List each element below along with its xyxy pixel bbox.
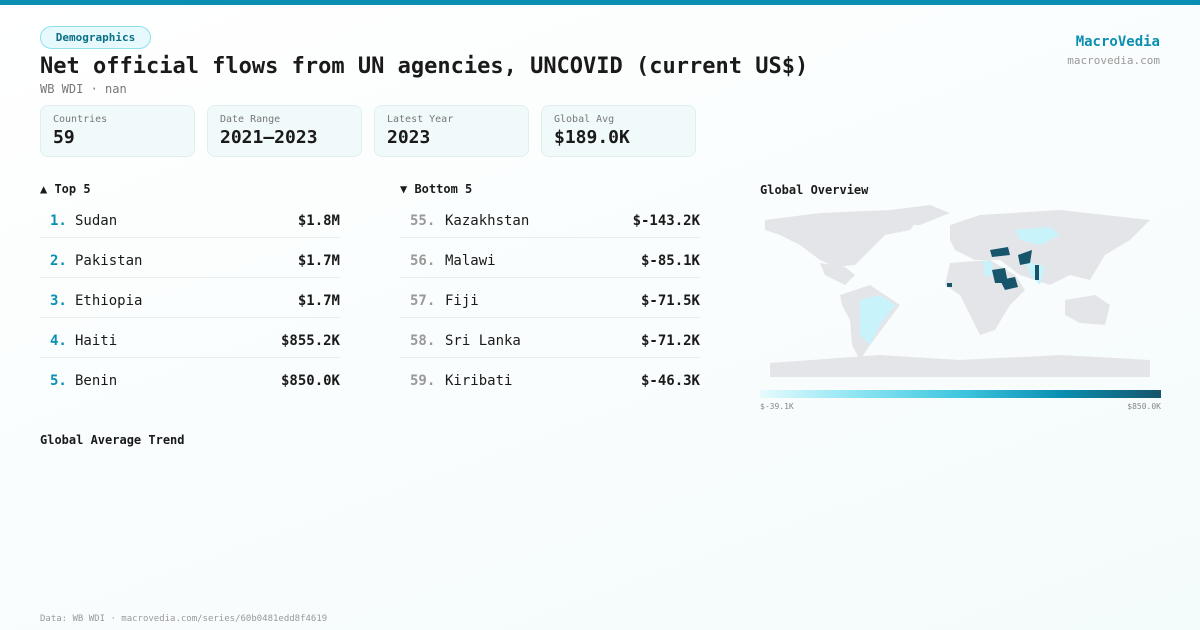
list: bottom 5: Kiribati — [445, 373, 512, 389]
brand: macrovedia.com — [1067, 54, 1160, 67]
list: bottom 5: 58. — [410, 333, 435, 349]
list: bottom 5: 56. — [410, 253, 435, 269]
list: bottom 5: Fiji — [445, 293, 479, 309]
stat card: Global Avg: $189.0K — [554, 127, 630, 148]
list: bottom 5: $-71.2K — [641, 333, 700, 349]
stat card: Countries — [40, 105, 195, 157]
map — [765, 205, 1150, 377]
list: bottom 5: Malawi — [445, 253, 496, 269]
brand — [1067, 34, 1160, 67]
stat card: Global Avg — [541, 105, 696, 157]
stat card: Date Range: 2021–2023 — [220, 127, 318, 148]
heading: Global Overview: Global Overview — [760, 183, 868, 197]
list: bottom 5: 57. — [410, 293, 435, 309]
list: top 5: $855.2K — [281, 333, 340, 349]
list: top 5: Benin — [75, 373, 117, 389]
list: top 5: Pakistan — [75, 253, 142, 269]
footer: Data: WB WDI · macrovedia.com/series/60b0481edd8f4619 — [40, 614, 327, 624]
list: bottom 5: $-85.1K — [641, 253, 700, 269]
list: top 5: $1.8M — [298, 213, 340, 229]
list: bottom 5: $-143.2K — [633, 213, 700, 229]
top bar — [0, 0, 1200, 5]
heading: Global Average Trend: Global Average Trend — [40, 433, 184, 447]
list: top 5: $850.0K — [281, 373, 340, 389]
list: top 5: $1.7M — [298, 253, 340, 269]
list: top 5: Sudan — [75, 213, 117, 229]
list: top 5: 2. — [50, 253, 67, 269]
heading: Bottom 5: ▼ Bottom 5 — [400, 182, 472, 196]
list: bottom 5: $-71.5K — [641, 293, 700, 309]
subtitle: WB WDI · nan — [40, 82, 127, 96]
list: top 5: $1.7M — [298, 293, 340, 309]
list: bottom 5: Sri Lanka — [445, 333, 521, 349]
color legend: $850.0K — [1127, 402, 1161, 411]
stat card: Date Range — [207, 105, 362, 157]
heading: Top 5: ▲ Top 5 — [40, 182, 91, 196]
tag: Demographics — [40, 26, 151, 49]
stat card: Latest Year: Latest Year — [387, 114, 453, 125]
list: top 5: 4. — [50, 333, 67, 349]
stat card: Date Range: Date Range — [220, 114, 280, 125]
stat card: Latest Year — [374, 105, 529, 157]
stat card: Countries: 59 — [53, 127, 75, 148]
brand: MacroVedia — [1076, 34, 1160, 50]
list: top 5: 3. — [50, 293, 67, 309]
list: bottom 5 — [400, 213, 700, 389]
list: top 5 — [40, 213, 340, 389]
list: bottom 5: 59. — [410, 373, 435, 389]
stat card: Countries: Countries — [53, 114, 107, 125]
stat card: Latest Year: 2023 — [387, 127, 430, 148]
list: top 5: Ethiopia — [75, 293, 142, 309]
color legend: $-39.1K — [760, 402, 794, 411]
stat card: Global Avg: Global Avg — [554, 114, 614, 125]
tag: Demographics: Demographics — [56, 31, 135, 44]
list: top 5: 5. — [50, 373, 67, 389]
list: bottom 5: Kazakhstan — [445, 213, 529, 229]
list: bottom 5: 55. — [410, 213, 435, 229]
list: bottom 5: $-46.3K — [641, 373, 700, 389]
title: Net official flows from UN agencies, UNCOVID (current US$) — [40, 54, 808, 79]
list: top 5: Haiti — [75, 333, 117, 349]
color legend — [760, 390, 1161, 411]
list: top 5: 1. — [50, 213, 67, 229]
